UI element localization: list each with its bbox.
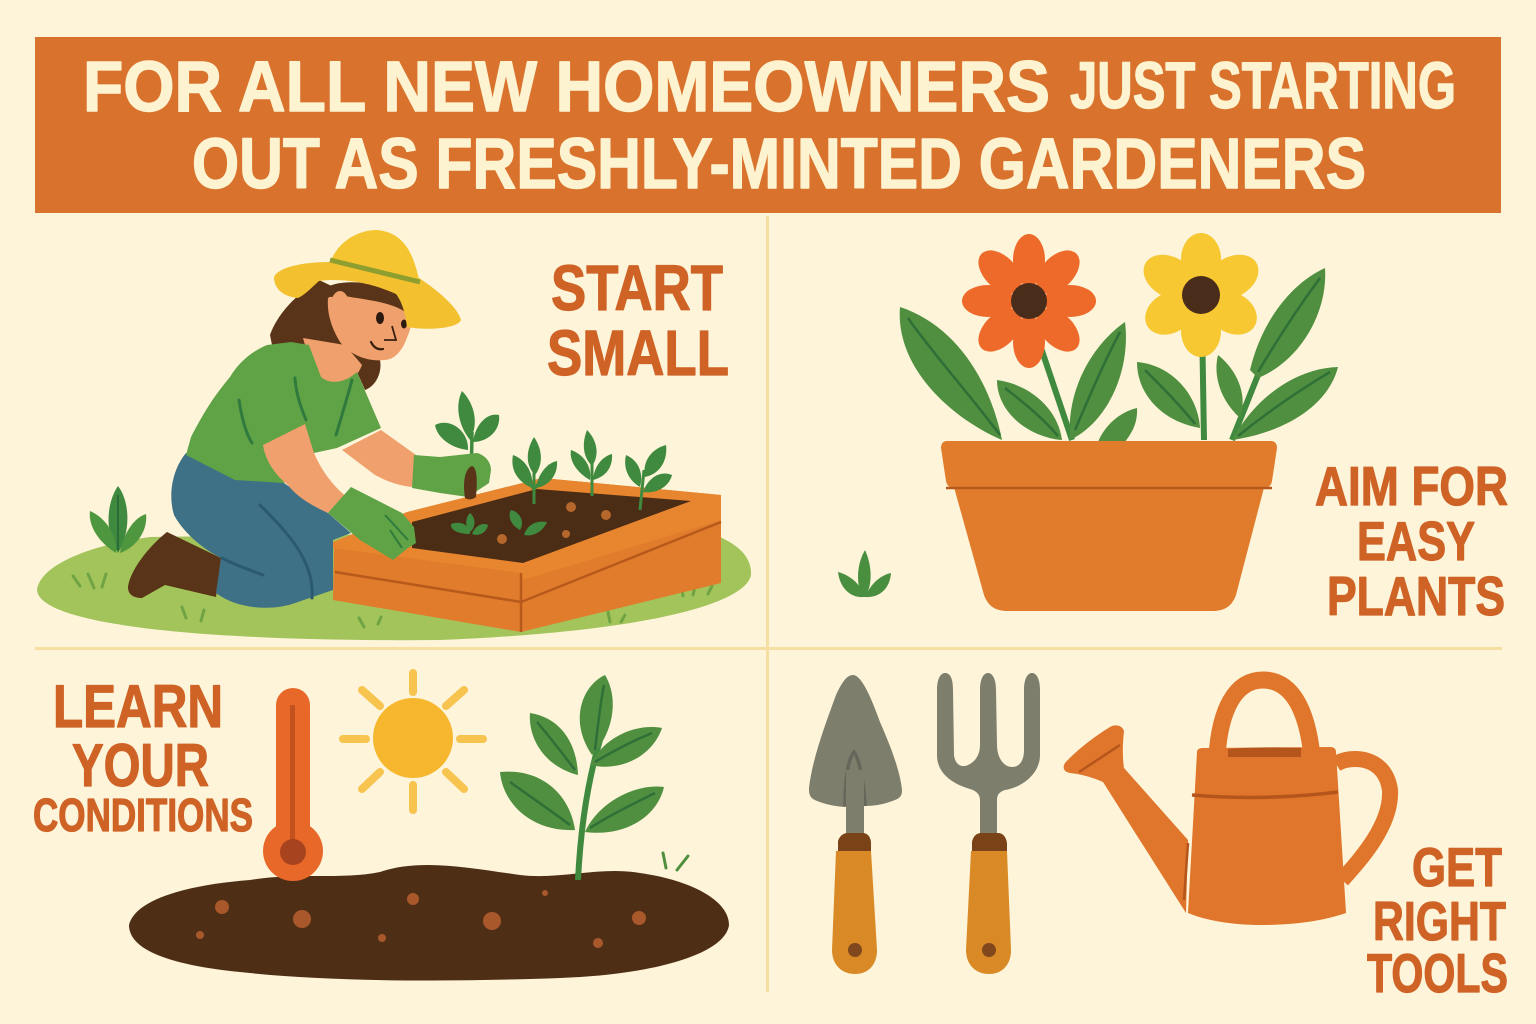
title banner <box>35 37 1501 213</box>
garden fork <box>937 673 1040 974</box>
held seedling <box>435 391 499 490</box>
flower pot <box>941 441 1277 611</box>
front arm <box>263 424 347 513</box>
label: learn your conditions: YOUR <box>72 732 209 799</box>
sun hat <box>274 230 461 329</box>
shirt <box>186 342 381 483</box>
ear <box>331 291 349 319</box>
small sprouts in soil <box>451 510 547 535</box>
soil mound <box>129 865 729 980</box>
label: start small <box>547 252 729 389</box>
sun <box>343 673 483 810</box>
trowel <box>809 675 902 974</box>
eyes and smile <box>371 312 407 349</box>
hair bangs <box>322 282 416 318</box>
back hair <box>270 280 380 390</box>
seedling row <box>512 430 672 510</box>
neck <box>303 338 362 387</box>
label: get right tools <box>1367 836 1508 1004</box>
plant behind the woman <box>90 486 146 553</box>
label: learn your conditions: LEARN <box>53 673 223 740</box>
label: learn your conditions: CONDITIONS <box>33 789 253 841</box>
label: aim for easy plants: EASY <box>1357 510 1475 572</box>
leaves <box>900 268 1338 442</box>
front glove <box>328 487 416 560</box>
orange flower <box>962 234 1096 368</box>
seedling root ball <box>464 466 477 499</box>
jeans <box>171 453 351 608</box>
label: start small: START <box>551 252 723 324</box>
grass tufts <box>73 574 712 627</box>
boot <box>128 532 221 598</box>
small sprout <box>838 550 891 597</box>
soil pebbles <box>196 890 646 948</box>
panel: start small <box>37 230 751 640</box>
panel: learn your conditions <box>33 673 729 980</box>
back glove <box>412 453 491 497</box>
young plant <box>500 675 664 880</box>
leaf veins <box>908 278 1330 436</box>
jeans fold lines <box>222 505 312 598</box>
panel: aim for easy plants <box>838 233 1508 627</box>
flower stems <box>1035 320 1262 440</box>
shirt fold lines <box>239 378 352 443</box>
thermometer <box>263 688 323 881</box>
label: get right tools: GET <box>1412 836 1502 898</box>
raised bed <box>333 478 721 632</box>
face <box>328 295 411 360</box>
yellow flower <box>1136 233 1266 357</box>
panel: get right tools <box>809 673 1508 1004</box>
title banner: FOR ALL NEW HOMEOWNERS <box>83 48 1050 127</box>
watering can <box>1064 680 1390 925</box>
title banner: OUT AS FRESHLY-MINTED GARDENERS <box>192 125 1366 204</box>
back arm <box>342 430 416 487</box>
label: learn your conditions <box>33 673 253 841</box>
sprout marks <box>663 853 688 870</box>
grass patch <box>37 530 751 640</box>
label: aim for easy plants <box>1315 455 1508 627</box>
label: start small: SMALL <box>547 317 729 389</box>
